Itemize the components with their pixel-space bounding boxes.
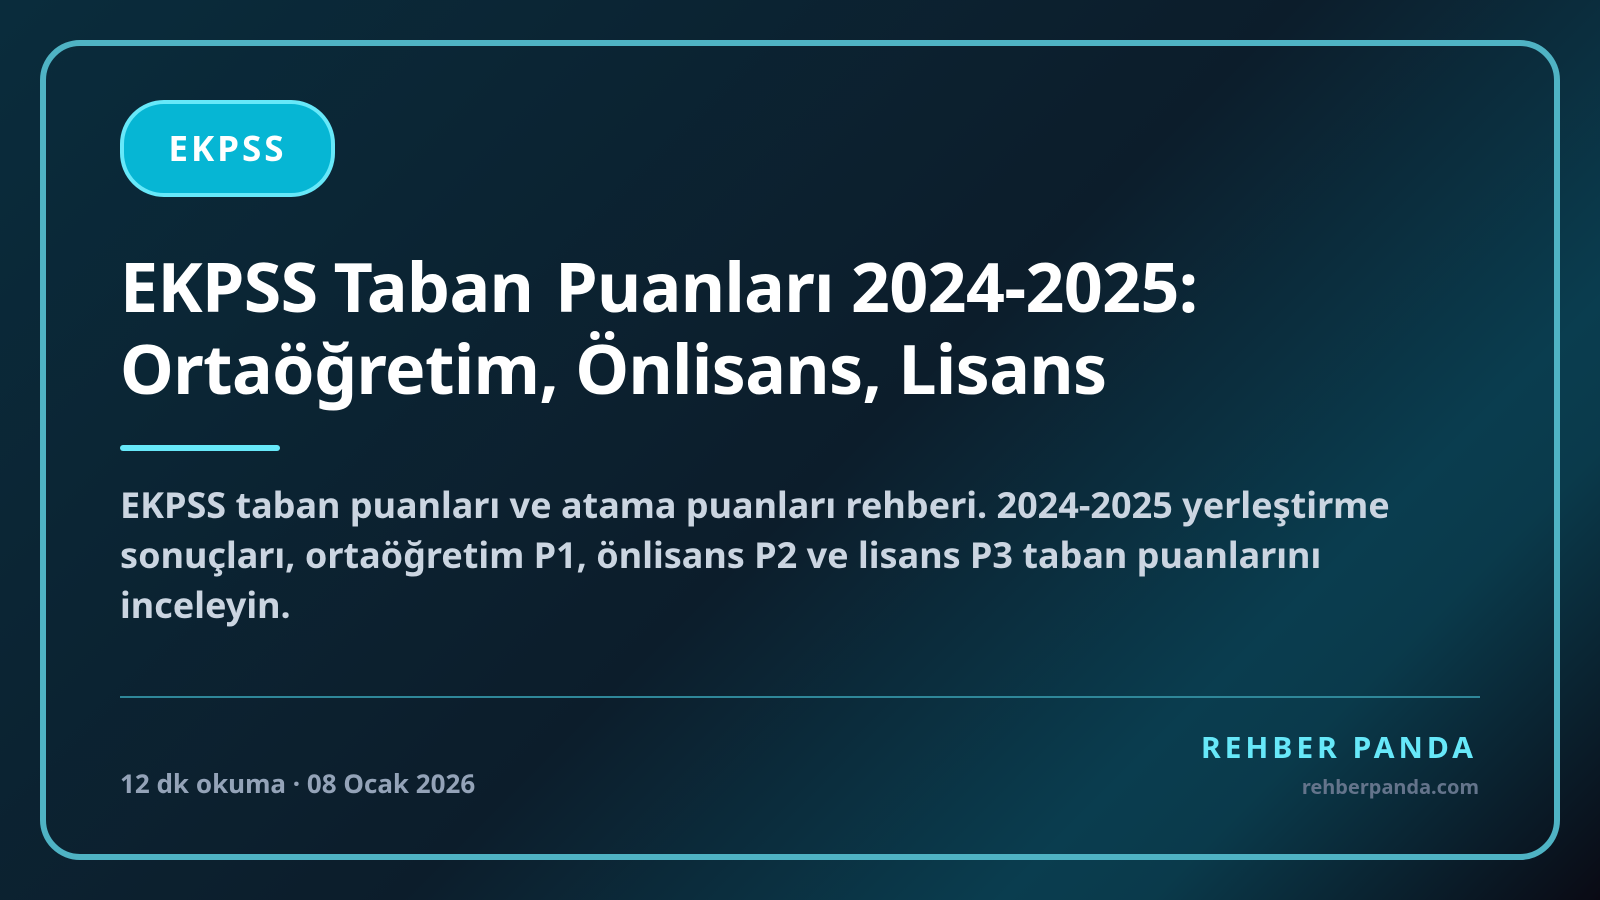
footer divider — [120, 696, 1480, 698]
accent bar — [120, 445, 280, 451]
brand name: REHBER PANDA — [1201, 726, 1477, 767]
description: EKPSS taban puanları ve atama puanları rehberi. 2024-2025 yerleştirme — [120, 480, 1390, 529]
badge: EKPSS: EKPSS — [168, 125, 287, 172]
description: inceleyin. — [120, 580, 291, 629]
title: Ortaöğretim, Önlisans, Lisans — [120, 321, 1107, 414]
reading time and date: 12 dk okuma · 08 Ocak 2026 — [120, 765, 475, 801]
badge: EKPSS — [120, 100, 335, 197]
website: rehberpanda.com — [1302, 773, 1479, 800]
title: EKPSS Taban Puanları 2024-2025: — [120, 239, 1197, 332]
title — [120, 239, 1197, 414]
description: sonuçları, ortaöğretim P1, önlisans P2 ve lisans P3 taban puanlarını — [120, 530, 1321, 579]
description — [120, 480, 1390, 629]
